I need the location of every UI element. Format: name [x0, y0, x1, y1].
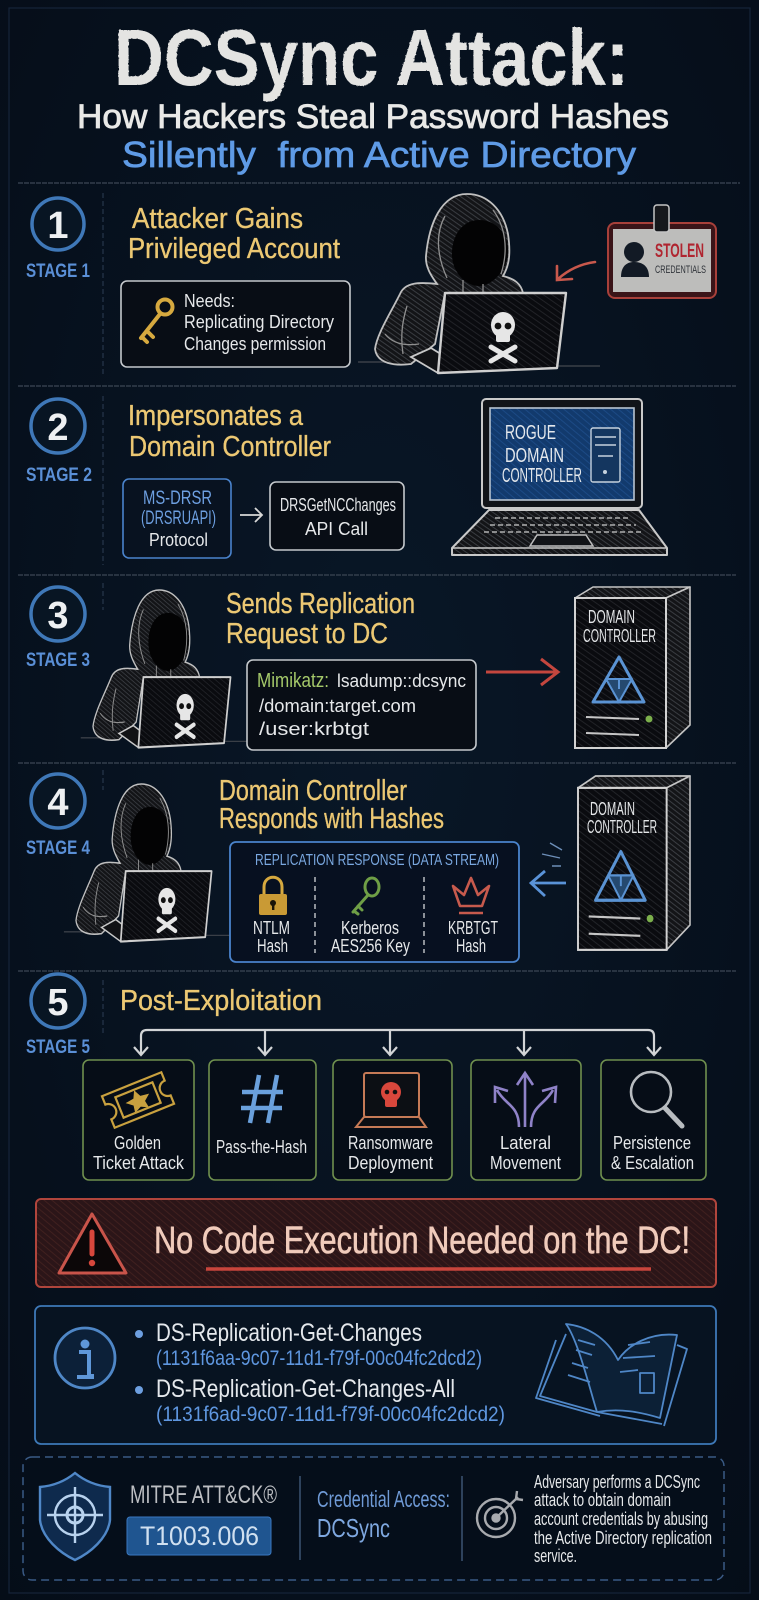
mimikatz command box [247, 660, 476, 750]
bullet list: (1131f6aa-9c07-11d1-f79f-00c04fc2dcd2) [156, 1347, 482, 1370]
stage 5 badge: 5 [47, 982, 69, 1024]
domain controller tower: DOMAIN [590, 799, 635, 819]
stage 2 badge [26, 399, 92, 486]
arrow: response from DC [531, 843, 566, 896]
hooded hacker with laptop [358, 194, 600, 373]
stage 3 badge [26, 587, 90, 671]
replication response box [230, 842, 519, 962]
technique description: service. [534, 1546, 577, 1566]
replication response box: KRBTGT [448, 918, 498, 938]
icon: crown [453, 878, 489, 913]
arrow: red to hacker [557, 262, 595, 280]
card: ransomware [333, 1060, 452, 1180]
protocol box: (DRSRUAPI) [141, 508, 216, 529]
stolen credentials badge: STOLEN [655, 241, 704, 262]
panel: stage 2 [26, 399, 667, 558]
stage 1 heading: Attacker Gains [132, 203, 303, 235]
mimikatz command box: /domain:target.com [259, 696, 416, 716]
stolen credentials badge: CREDENTIALS [655, 264, 706, 276]
stage 3 heading: Sends Replication [226, 588, 415, 620]
stage 2 badge: STAGE 2 [26, 465, 92, 486]
card: ransomware: Deployment [348, 1153, 433, 1173]
bullet list: (1131f6ad-9c07-11d1-f79f-00c04fc2dcd2) [156, 1403, 505, 1426]
arrow: protocol to API [240, 508, 262, 522]
MITRE label: MITRE ATT&CK® [130, 1481, 277, 1509]
icon: magnifier [631, 1072, 682, 1126]
bullet list: DS-Replication-Get-Changes-All [156, 1375, 455, 1403]
replication response box: Kerberos [341, 918, 399, 938]
icon: green key [353, 878, 379, 914]
rogue laptop: CONTROLLER [502, 465, 582, 487]
stage 1 badge: 1 [47, 205, 69, 247]
callout: no code execution [36, 1199, 716, 1287]
stage 4 heading: Responds with Hashes [219, 803, 444, 835]
rogue laptop [452, 399, 667, 555]
card: pass the hash [209, 1060, 316, 1180]
panel: stage 4 [26, 774, 690, 962]
stage 5 heading: Post-Exploitation [120, 985, 322, 1017]
panel: MITRE ATT&CK [23, 1457, 724, 1580]
stage 4 heading [219, 775, 444, 835]
protocol box [123, 479, 231, 558]
tactic label: DCSync [317, 1513, 390, 1543]
stage 4 heading: Domain Controller [219, 775, 407, 807]
icon: warning triangle [59, 1214, 126, 1273]
card: pass the hash: Pass-the-Hash [216, 1137, 307, 1157]
icon: gold key [141, 300, 172, 342]
hooded hacker with laptop [64, 784, 236, 942]
icon: target with dart [477, 1491, 523, 1537]
stage 2 badge: 2 [47, 407, 69, 449]
stage 3 badge: 3 [47, 595, 69, 637]
bullet list [135, 1319, 505, 1426]
needs box: Needs: [184, 291, 235, 311]
API call box [270, 482, 404, 550]
card: persistence: Persistence [613, 1133, 691, 1153]
replication response box: AES256 Key [331, 936, 410, 956]
replication response box: REPLICATION RESPONSE (DATA STREAM) [255, 852, 499, 869]
card: ransomware: Ransomware [348, 1133, 433, 1153]
replication response box: Hash [456, 936, 486, 956]
API call box: API Call [305, 519, 368, 539]
stage 5 badge [26, 974, 90, 1058]
stage 3 badge: STAGE 3 [26, 650, 90, 671]
icon: padlock [259, 877, 287, 915]
API call box: DRSGetNCChanges [280, 495, 396, 515]
stolen credentials badge [608, 205, 716, 298]
stage 1 badge: STAGE 1 [26, 261, 90, 282]
domain controller tower: CONTROLLER [583, 626, 656, 646]
icon: diverging arrows [495, 1073, 556, 1127]
title: Sillently from Active Directory [122, 134, 636, 175]
card: persistence: & Escalation [611, 1153, 694, 1173]
arrow: request to DC [486, 659, 558, 685]
stage 1 heading [128, 203, 340, 265]
stage 1 badge [26, 198, 90, 282]
icon: ticket [102, 1072, 174, 1128]
icon: open book [536, 1324, 687, 1426]
rogue laptop: DOMAIN [505, 445, 564, 467]
icon: info circle [55, 1328, 115, 1388]
needs box [121, 281, 350, 367]
panel: stage 5 [26, 974, 706, 1180]
replication response box: NTLM [253, 918, 290, 938]
card: golden ticket [83, 1060, 194, 1180]
technique id badge: T1003.006 [140, 1521, 259, 1551]
mimikatz command box: /user:krbtgt [259, 719, 369, 739]
icon: hash [241, 1075, 283, 1123]
stage 5 badge: STAGE 5 [26, 1037, 90, 1058]
card: lateral movement: Lateral [500, 1133, 551, 1153]
domain controller tower: CONTROLLER [587, 817, 657, 837]
title: How Hackers Steal Password Hashes [77, 98, 669, 136]
card: lateral movement [471, 1060, 581, 1180]
panel: stage 3 [26, 587, 690, 750]
icon: laptop with red skull [356, 1073, 426, 1127]
panel: stage 1 [26, 194, 716, 373]
domain controller tower: DOMAIN [588, 607, 635, 627]
card: lateral movement: Movement [490, 1153, 561, 1173]
icon: shield with crosshair [40, 1473, 110, 1560]
needs box: Replicating Directory [184, 312, 334, 332]
stage 3 heading [226, 588, 415, 650]
hooded hacker with laptop [81, 590, 255, 748]
protocol box: Protocol [149, 530, 208, 550]
card: persistence [601, 1060, 706, 1180]
rogue laptop: ROGUE [505, 422, 556, 444]
card: golden ticket: Golden [114, 1133, 161, 1153]
stage 4 badge [26, 774, 90, 859]
protocol box: MS-DRSR [143, 488, 212, 509]
stage 1 heading: Privileged Account [128, 233, 340, 265]
domain controller tower [575, 587, 690, 748]
stage 4 badge: 4 [47, 782, 69, 824]
mimikatz command box: lsadump::dcsync [337, 671, 466, 691]
branching arrows [134, 1030, 661, 1055]
stage 2 heading [128, 400, 331, 463]
technique description [534, 1472, 712, 1566]
needs box: Changes permission [184, 334, 326, 354]
domain controller tower [578, 776, 690, 950]
tactic label [317, 1486, 450, 1543]
title [77, 13, 669, 175]
title: DCSync Attack: [114, 13, 629, 102]
stage 2 heading: Domain Controller [129, 431, 331, 463]
stage 3 heading: Request to DC [226, 618, 388, 650]
replication response box: Hash [257, 936, 288, 956]
stage 4 badge: STAGE 4 [26, 838, 90, 859]
tactic label: Credential Access: [317, 1486, 450, 1512]
technique description: attack to obtain domain [534, 1490, 671, 1510]
bullet list: DS-Replication-Get-Changes [156, 1319, 422, 1347]
stage 2 heading: Impersonates a [128, 400, 304, 432]
card: golden ticket: Ticket Attack [93, 1153, 185, 1173]
panel: replication rights [35, 1306, 716, 1444]
mimikatz command box: Mimikatz: [257, 670, 329, 692]
